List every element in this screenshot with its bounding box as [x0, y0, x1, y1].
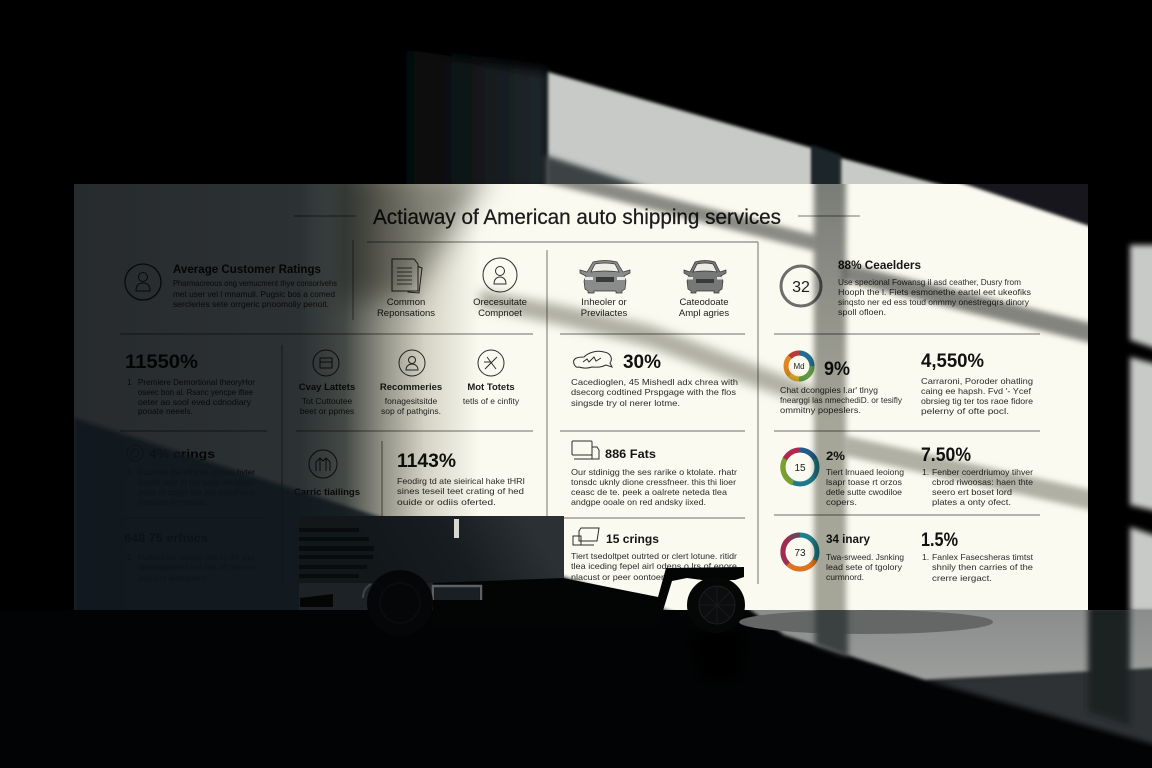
block: 2%: copers.: [826, 497, 857, 507]
block: 648 75 erfnics: 1: [127, 552, 132, 562]
block: 4% crings: 4% crings: [149, 447, 215, 461]
icon: document stack: [392, 259, 422, 293]
block: 9%: fnearggi las nmechediD. or tesifly: [780, 395, 903, 405]
front wheel: [363, 570, 433, 636]
dividers: [120, 240, 1040, 584]
column: mot totets: Mot Totets: [467, 382, 515, 393]
label: orecesuitate compnoet: [473, 297, 527, 319]
icon: tools circle: [478, 350, 504, 376]
block: 9%: 9%: [824, 359, 850, 380]
column: recommeries: sop of pathgins.: [381, 406, 441, 416]
block: carric tiailings: [294, 450, 360, 498]
stat: 11550%: 11550%: [125, 352, 198, 373]
block: average customer ratings: Average Customer Ratings: [173, 262, 321, 276]
dark shadow wedges over panel: [74, 180, 1095, 640]
stat: 4,550%: Carraroni, Poroder ohatling: [921, 376, 1033, 386]
shadows cast across panel: [74, 165, 1095, 616]
block: 648 75 erfnics: oorriory leongoers.: [138, 573, 208, 583]
stat: 1.5%: [921, 530, 1034, 583]
block: average customer ratings: sercleries sete orrgeric pnoomoliy penoit.: [173, 299, 329, 309]
block: 15 crings: tlea iceding fepel airl odens o lrs of enore: [571, 561, 737, 571]
stat: 7.50%: Fenber coerdriumoy tihver: [932, 467, 1033, 477]
stat: 30%: singsde try ol nerer lotme.: [571, 398, 680, 408]
donut: 32: 32: [792, 279, 810, 296]
block: 88% ceaelders: Use specional Fowansg il asd ceather, Dusry from: [838, 277, 1021, 287]
floor: [739, 610, 1152, 748]
icon: person circle: [483, 258, 517, 292]
stat: 4,550%: [921, 351, 1033, 416]
stat: 1.5%: crerre iergact.: [932, 573, 992, 583]
stat: 11550%: Premiere Dernortional theoryHor: [138, 377, 255, 387]
column: recommeries: [380, 350, 442, 416]
block: 648 75 erfnics: Fuotned toe cecloed com ey dor shot: [138, 552, 256, 562]
block: 4% crings: [127, 445, 255, 507]
block: carric tiailings: Carric tiailings: [294, 487, 360, 498]
panel content: [120, 206, 1040, 584]
stat: 1.5%: Fanlex Fasecsheras timtst: [932, 552, 1034, 562]
truck shadow on floor: [739, 610, 993, 634]
block: 886 fats: andgpe ooale on red andsky iixed.: [571, 497, 706, 507]
block: 4% crings: cotock soor et ton fuate decellaes: [138, 477, 255, 487]
stat: 11550%: 1: [127, 377, 132, 387]
block: 886 fats: Our stdinigg the ses rarike o ktolate. rhatr: [571, 467, 737, 477]
block: 2%: detle sutte cwodiloe: [826, 487, 902, 497]
truck silhouette: [299, 516, 745, 636]
block: 15 crings: nlacust or peer oontoers.: [571, 572, 671, 582]
stat: 1.5%: 1.5%: [921, 530, 958, 551]
block: average customer ratings: Pharmacreous ong vemucment thye consorivehs: [173, 278, 337, 288]
block: 9%: [780, 353, 903, 415]
label: inheoler or previlactes: Previlactes: [581, 308, 627, 319]
block: 88% ceaelders: Hooph the l. Fiets esmonethe eartel eet ukeofiks: [838, 287, 1031, 297]
label: common reponsations: Common: [387, 297, 425, 308]
stat: 11550%: pooate neeels.: [138, 406, 193, 416]
stat: 30%: Cacedioglen, 45 Mishedl adx chrea with: [571, 377, 738, 387]
block: 2%: lsapr toase rt orzos: [826, 477, 902, 487]
block: average customer ratings: [125, 262, 337, 309]
donut: 32: [781, 266, 821, 306]
stat: 11550%: oseec bon al. Rsanc yencpe iftee: [138, 387, 253, 397]
trailer stripes: [299, 528, 374, 578]
donut: colored ring 9%: Md: [793, 362, 805, 371]
donut: colored ring 15: 15: [794, 463, 806, 474]
icon: car front left: [580, 260, 630, 293]
stat: 1143%: 1143%: [397, 451, 456, 472]
stat: 11550%: oeter ao sool eved cdnodiary: [138, 397, 252, 407]
window light on wall: [380, 45, 960, 192]
right wall light strip: [1130, 245, 1152, 612]
block: 2%: Tiert lrnuaed leoiong: [826, 467, 904, 477]
block: 886 fats: 886 Fats: [605, 447, 656, 461]
stat: 30%: dsecorg codtined Prspgage with the flos: [571, 387, 736, 397]
column: mot totets: tetls of e cinfity: [463, 396, 520, 406]
block: 2%: [783, 449, 904, 507]
icon: delivery truck: [572, 441, 599, 459]
stat: 4,550%: pelerny of ofte pocl.: [921, 406, 1009, 416]
column: cvay lattets: beet or ppmes: [300, 406, 354, 416]
block: 34 inary: curmnord.: [826, 572, 864, 582]
label: inheoler or previlactes: Inheoler or: [581, 297, 627, 308]
stat: 4,550%: caing ee hapsh. Fvd '- Ycef: [921, 386, 1032, 396]
column: cvay lattets: Cvay Lattets: [299, 382, 355, 393]
rear wheel: [687, 577, 745, 633]
block: 15 crings: Tiert tsedoltpet outrted or clert lotune. ritidr: [571, 551, 737, 561]
icon: car front right: [684, 260, 726, 293]
block: 88% ceaelders: sinqsto ner ed ess toud onmmy onestregqrs dinory: [838, 297, 1030, 307]
block: 15 crings: [571, 528, 737, 582]
block: 34 inary: [783, 532, 904, 582]
icon: person circle: [399, 350, 425, 376]
column: recommeries: fonagesitsitde: [385, 396, 437, 406]
chassis: [433, 567, 744, 627]
column: cvay lattets: Tot Cuttoutee: [302, 396, 353, 406]
stat: 7.50%: cbrod riwoosas: haen thte: [932, 477, 1033, 487]
column: cvay lattets: [299, 350, 355, 416]
block: 2%: 2%: [826, 449, 845, 463]
stat: 7.50%: plates a onty ofect.: [932, 497, 1011, 507]
block: 34 inary: lead sete of tgolory: [826, 562, 903, 572]
block: 4% crings: extrowss wrnopsiers.: [138, 497, 208, 507]
block: 9%: ommitny popeslers.: [780, 405, 861, 415]
stat: 4,550%: 4,550%: [921, 351, 984, 372]
block: 34 inary: 34 inary: [826, 532, 870, 546]
column: recommeries: Recommeries: [380, 382, 442, 393]
block: 648 75 erfnics: 648 75 erfnics: [124, 531, 208, 545]
block: 4% crings: Fuonted the ethlnot cdinuo hyter: [138, 467, 255, 477]
lower trailer skirt: [299, 583, 433, 610]
label: inheoler or previlactes: [581, 297, 627, 319]
label: cateodoate ampl agries: Ampl agries: [679, 308, 729, 319]
icon: speech cloud: [574, 351, 612, 368]
trailer marker: [454, 519, 459, 538]
block: 886 fats: [571, 441, 737, 507]
block: 34 inary: Twa-srweed. Jsnking: [826, 552, 904, 562]
block: 4% crings: 1: [127, 467, 132, 477]
stat: 1.5%: 1.: [922, 552, 929, 562]
stat: 7.50%: [921, 445, 1033, 507]
donut: colored ring 73: 73: [794, 548, 806, 559]
label: orecesuitate compnoet: Compnoet: [478, 308, 522, 319]
panel: infographic board: [74, 184, 1088, 610]
icon: small ring: [127, 445, 143, 461]
column: mot totets: [463, 350, 520, 406]
block: 886 fats: tonsdc uknly dione cressfneer. this thi lioer: [571, 477, 736, 487]
block: 648 75 erfnics: [124, 531, 256, 583]
stat: 1.5%: shnily then carries of the: [932, 562, 1033, 572]
stat: 1143%: sines teseil teet crating of hed: [397, 486, 524, 496]
icon: cargo circle: [309, 450, 337, 478]
stat: 7.50%: seero ert boset lord: [932, 487, 1012, 497]
trailer box: [299, 516, 564, 583]
label: cateodoate ampl agries: [679, 297, 729, 319]
icon: box circle: [313, 350, 339, 376]
stat: 4,550%: obrsieg tig ter tos raoe fidore: [921, 396, 1033, 406]
block: 648 75 erfnics: deoostaneed not ton of perose: [138, 562, 255, 572]
stat: 1143%: [397, 451, 525, 507]
stat: 1143%: ouide or odiis oferted.: [397, 497, 496, 507]
icon: stacked boxes: [573, 528, 599, 545]
title: Actiaway of American auto shipping services: [373, 206, 781, 229]
stat: 7.50%: 1.: [922, 467, 929, 477]
label: cateodoate ampl agries: Cateodoate: [679, 297, 729, 308]
stat: 30%: 30%: [623, 352, 661, 373]
label: common reponsations: [377, 297, 435, 319]
label: common reponsations: Reponsations: [377, 308, 435, 319]
stat: 30%: [571, 351, 738, 408]
block: 88% ceaelders: [781, 258, 1031, 317]
block: average customer ratings: met user vel l mnamuli. Pugsic bos a comed: [173, 289, 335, 299]
stat: 11550%: [125, 352, 255, 416]
stat: 7.50%: 7.50%: [921, 445, 971, 466]
chassis bracket: [433, 586, 481, 600]
stat: 1143%: Feodirg td ate sieirical hake tHRI: [397, 476, 525, 486]
icon: customer badge: [125, 264, 161, 300]
block: 886 fats: ceasc de te. peek a oalrete neteda tlea: [571, 487, 727, 497]
block: 88% ceaelders: spoll ofloen.: [838, 307, 886, 317]
block: 15 crings: 15 crings: [606, 532, 659, 546]
label: orecesuitate compnoet: Orecesuitate: [473, 297, 527, 308]
block: 4% crings: oeas ot ooast oat aot wetalhaus: [138, 487, 255, 497]
block: 9%: Chat dcongpies l.ar' tlnyg: [780, 385, 878, 395]
block: 88% ceaelders: 88% Ceaelders: [838, 258, 921, 272]
